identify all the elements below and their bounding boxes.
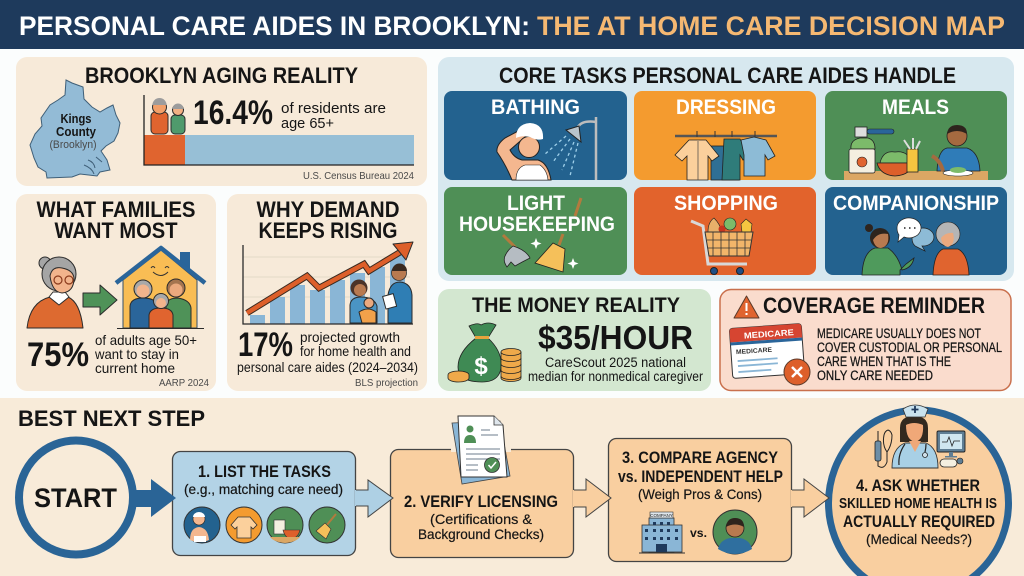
panel: why demand keeps rising	[227, 194, 427, 391]
icon: Medicare card	[729, 324, 810, 385]
icon: money bag and coins	[448, 323, 521, 382]
tile: bathing	[444, 91, 627, 180]
stat description: personal care aides (2024–2034)	[237, 359, 418, 375]
body text	[817, 326, 1002, 383]
panel: the money reality	[438, 289, 711, 391]
stat description	[94, 332, 197, 376]
icon: grandmother	[27, 257, 83, 328]
heading	[256, 197, 400, 243]
icon: two people talking	[862, 218, 969, 275]
stat description	[528, 355, 703, 384]
stat description: age 65+	[281, 116, 334, 132]
heading: WANT MOST	[54, 218, 178, 243]
icon: two older adults	[151, 98, 185, 134]
panel: coverage reminder	[720, 290, 1011, 390]
heading: WHAT FAMILIES	[36, 197, 196, 222]
arrow: step 3 to step 4	[791, 479, 829, 517]
step 1 box: 1. LIST THE TASKS	[198, 462, 331, 481]
tile: meals	[825, 91, 1007, 180]
body text: ONLY CARE NEEDED	[817, 368, 933, 383]
step 2 box: 2. VERIFY LICENSING	[404, 492, 558, 511]
start circle	[19, 440, 133, 554]
step 3 box: 3. COMPARE AGENCY	[622, 448, 779, 467]
heading: KEEPS RISING	[258, 218, 398, 243]
start circle: START	[34, 483, 117, 513]
stat description: for home health and	[300, 343, 411, 359]
step 4 circle: ACTUALLY REQUIRED	[843, 512, 995, 531]
step 1 box: (e.g., matching care need)	[184, 481, 343, 497]
stat description: CareScout 2025 national	[545, 355, 686, 370]
heading: CORE TASKS PERSONAL CARE AIDES HANDLE	[499, 63, 956, 88]
chart: rising demand	[243, 242, 413, 324]
icon: independent caregiver	[713, 510, 757, 554]
tile: light housekeeping: HOUSEKEEPING	[459, 213, 615, 236]
heading: COVERAGE REMINDER	[763, 293, 985, 318]
stat description: median for nonmedical caregiver	[528, 369, 703, 384]
icon: money bag and coins: $	[474, 353, 488, 380]
step 1 box	[172, 452, 356, 556]
arrow: step 2 to step 3	[573, 479, 611, 517]
panel: what families want most	[16, 194, 216, 391]
stat description	[237, 329, 418, 375]
arrow	[83, 285, 117, 315]
icon: duster and broom	[503, 198, 581, 272]
stat: 17%: 17%	[238, 326, 293, 364]
step 2 box: Background Checks)	[418, 526, 544, 542]
map of Kings County: County	[56, 124, 97, 139]
step 4 circle: (Medical Needs?)	[866, 531, 972, 547]
header banner	[0, 0, 1024, 49]
stat description: of residents are	[281, 101, 386, 117]
body text: MEDICARE USUALLY DOES NOT	[817, 326, 981, 341]
icon: clothes on a rack	[675, 131, 777, 180]
heading: WHY DEMAND	[256, 197, 400, 222]
icon: licensing document	[452, 416, 510, 484]
stat: 16.4%: 16.4%	[193, 94, 273, 132]
stat: $35/hour: $35/HOUR	[538, 319, 693, 356]
source: AARP 2024	[159, 377, 209, 389]
step 3 box: (Weigh Pros & Cons)	[638, 486, 762, 502]
panel: best next step	[0, 398, 1024, 576]
stat description: projected growth	[300, 329, 400, 345]
icon: Medicare card: MEDICARE	[744, 327, 794, 341]
map of Kings County: Kings	[60, 111, 92, 126]
icon: housekeeping badge	[309, 507, 345, 543]
step 3 box	[608, 438, 792, 562]
icon: preparing and eating a meal	[844, 125, 988, 180]
tile: bathing: BATHING	[491, 96, 580, 119]
tile: shopping: SHOPPING	[674, 192, 778, 215]
panel: Brooklyn aging reality	[16, 57, 427, 186]
gap in top border behind document	[451, 447, 511, 452]
arrow: step 1 to step 2	[355, 480, 393, 517]
tile: meals: MEALS	[882, 96, 949, 119]
icon: bathing badge	[184, 507, 220, 543]
step 4 circle	[828, 405, 1008, 576]
heading	[36, 197, 196, 243]
bar chart: share of residents 65+	[144, 95, 414, 165]
tile: companionship	[825, 187, 1007, 275]
icon: meals badge	[267, 507, 303, 543]
tile: light housekeeping	[444, 187, 627, 275]
map of Kings County	[30, 80, 120, 178]
source: U.S. Census Bureau 2024	[303, 170, 414, 182]
tile: dressing: DRESSING	[676, 96, 776, 119]
step 2 box	[390, 416, 574, 558]
icon: agency building: COMPANY	[650, 513, 673, 518]
icon: shopping cart	[691, 218, 753, 274]
icon: agency building	[639, 512, 685, 553]
tile: companionship: COMPANIONSHIP	[833, 192, 999, 215]
stat description: current home	[95, 360, 175, 376]
step 4 circle: 4. ASK WHETHER	[856, 476, 980, 495]
arrow: start to step 1	[134, 479, 176, 517]
icon: Medicare card: MEDICARE	[736, 347, 773, 356]
step 2 box: (Certifications &	[430, 511, 533, 527]
body text: CARE WHEN THAT IS THE	[817, 354, 951, 369]
tile: shopping	[634, 187, 816, 275]
title: PERSONAL CARE AIDES IN BROOKLYN:	[19, 11, 530, 41]
vs label: vs.	[690, 526, 707, 540]
stat description: want to stay in	[94, 346, 179, 362]
heading: BEST NEXT STEP	[18, 406, 205, 431]
heading: THE MONEY REALITY	[472, 294, 680, 317]
panel: core tasks	[438, 57, 1014, 281]
icon: dressing badge	[226, 507, 262, 543]
tile: dressing	[634, 91, 816, 180]
source: BLS projection	[355, 377, 418, 389]
stat: 75%: 75%	[27, 336, 89, 374]
icon: happy family at home	[116, 248, 205, 328]
heading: BROOKLYN AGING REALITY	[85, 63, 358, 88]
map of Kings County: (Brooklyn)	[50, 139, 96, 151]
icon: caregivers with child	[350, 264, 412, 323]
step 3 box: vs. INDEPENDENT HELP	[618, 467, 783, 486]
stat description: of adults age 50+	[95, 332, 197, 348]
icon: warning triangle	[734, 296, 759, 318]
stat description	[281, 101, 386, 132]
icon: nurse with equipment	[875, 405, 965, 468]
icon: person showering	[497, 117, 596, 180]
subtitle: THE AT HOME CARE DECISION MAP	[537, 11, 1005, 41]
tile: light housekeeping: LIGHT	[507, 192, 565, 215]
